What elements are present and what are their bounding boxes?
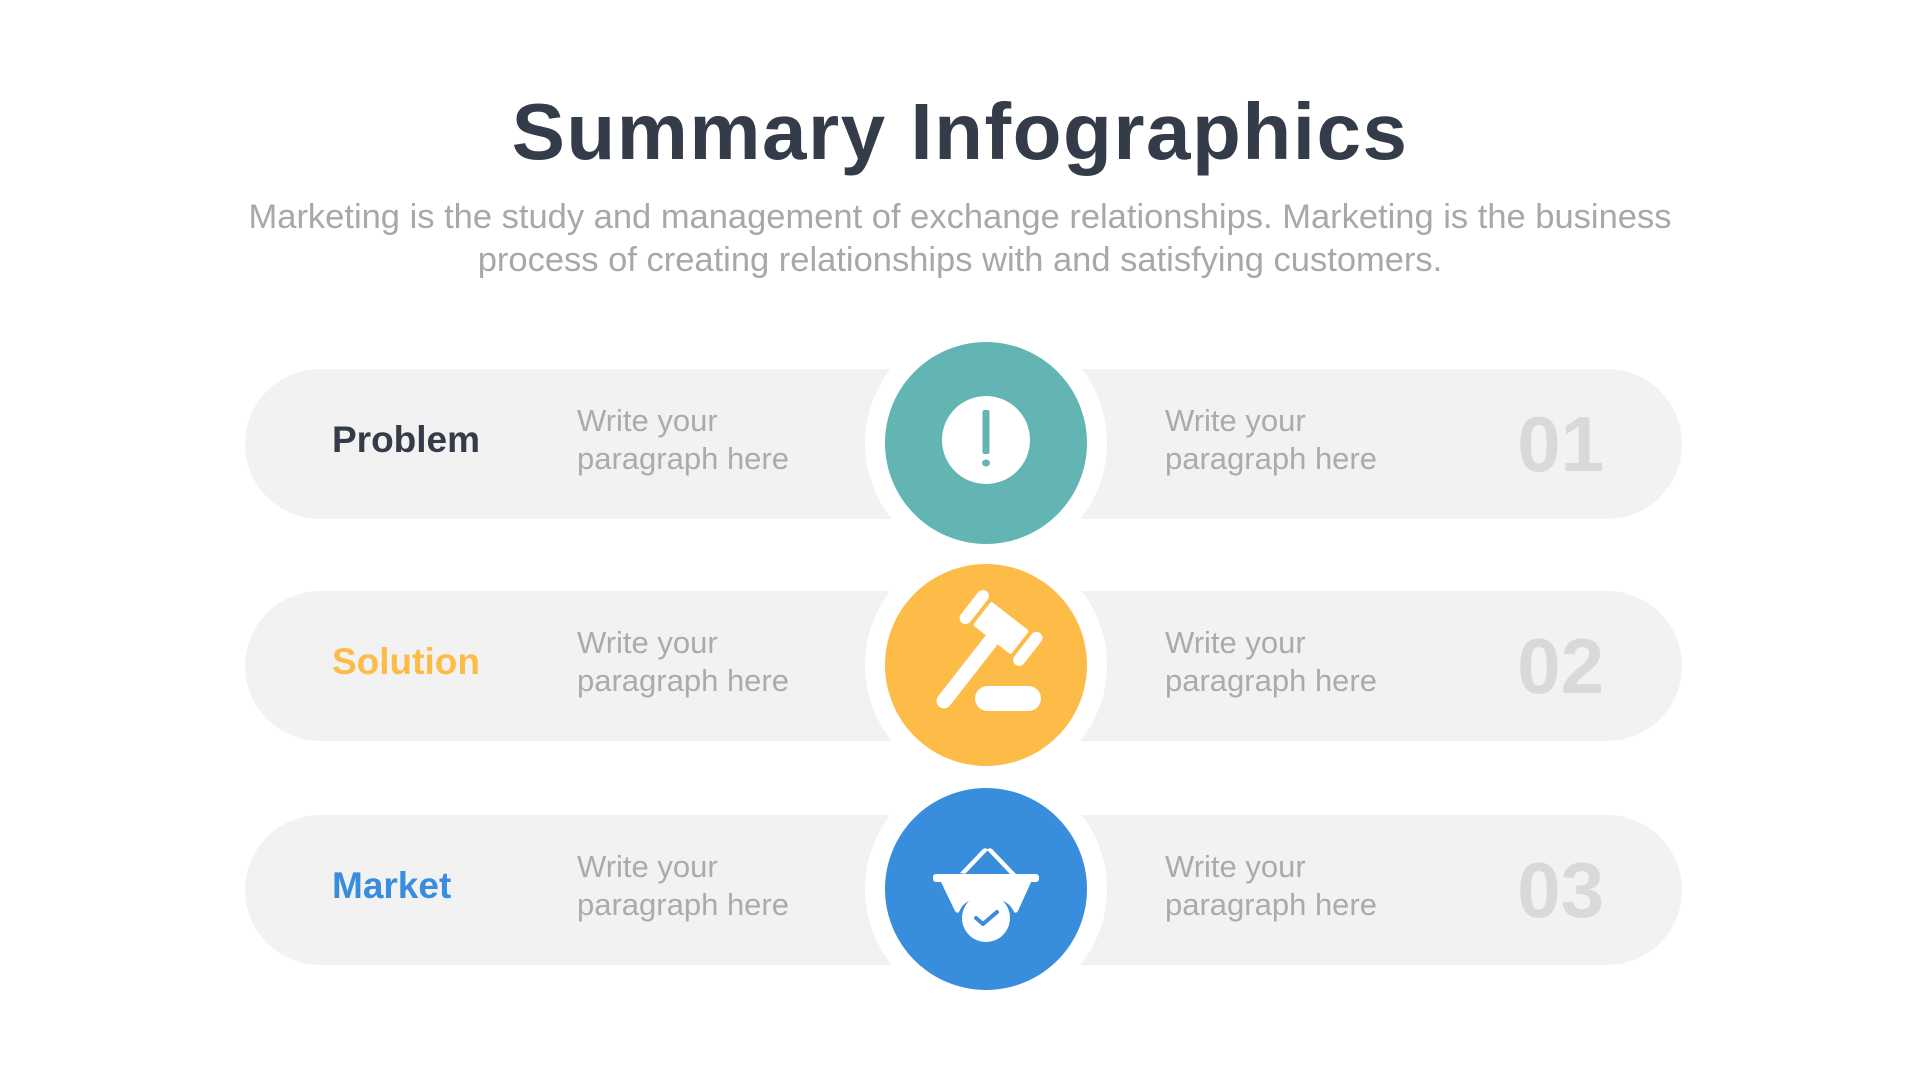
left paragraph: Write your <box>577 625 718 660</box>
icon: gavel circle <box>865 544 1107 786</box>
number 01: 01 <box>1517 400 1604 488</box>
panel: market <box>245 815 1682 965</box>
left paragraph: paragraph here <box>577 887 789 922</box>
label: problem: Problem <box>332 419 480 460</box>
subtitle: process of creating relationships with and satisfying customers. <box>478 241 1442 279</box>
left paragraph <box>577 625 789 698</box>
right paragraph: Write your <box>1165 625 1306 660</box>
right paragraph <box>1165 625 1377 698</box>
subtitle: Marketing is the study and management of exchange relationships. Marketing is the business <box>249 198 1671 236</box>
subtitle <box>249 198 1671 279</box>
icon: basket circle <box>865 768 1107 1010</box>
left paragraph <box>577 403 789 476</box>
panel: solution <box>245 591 1682 741</box>
right paragraph: paragraph here <box>1165 887 1377 922</box>
number 02: 02 <box>1517 622 1604 710</box>
right paragraph <box>1165 849 1377 922</box>
right paragraph <box>1165 403 1377 476</box>
left paragraph: paragraph here <box>577 441 789 476</box>
label: solution: Solution <box>332 641 480 682</box>
right paragraph: paragraph here <box>1165 663 1377 698</box>
panel: problem <box>245 369 1682 519</box>
left paragraph: paragraph here <box>577 663 789 698</box>
left paragraph <box>577 849 789 922</box>
label: market: Market <box>332 865 451 906</box>
left paragraph: Write your <box>577 849 718 884</box>
title: Summary Infographics <box>512 87 1408 176</box>
number 03: 03 <box>1517 846 1604 934</box>
icon: exclamation circle <box>865 322 1107 564</box>
left paragraph: Write your <box>577 403 718 438</box>
right paragraph: paragraph here <box>1165 441 1377 476</box>
right paragraph: Write your <box>1165 849 1306 884</box>
right paragraph: Write your <box>1165 403 1306 438</box>
